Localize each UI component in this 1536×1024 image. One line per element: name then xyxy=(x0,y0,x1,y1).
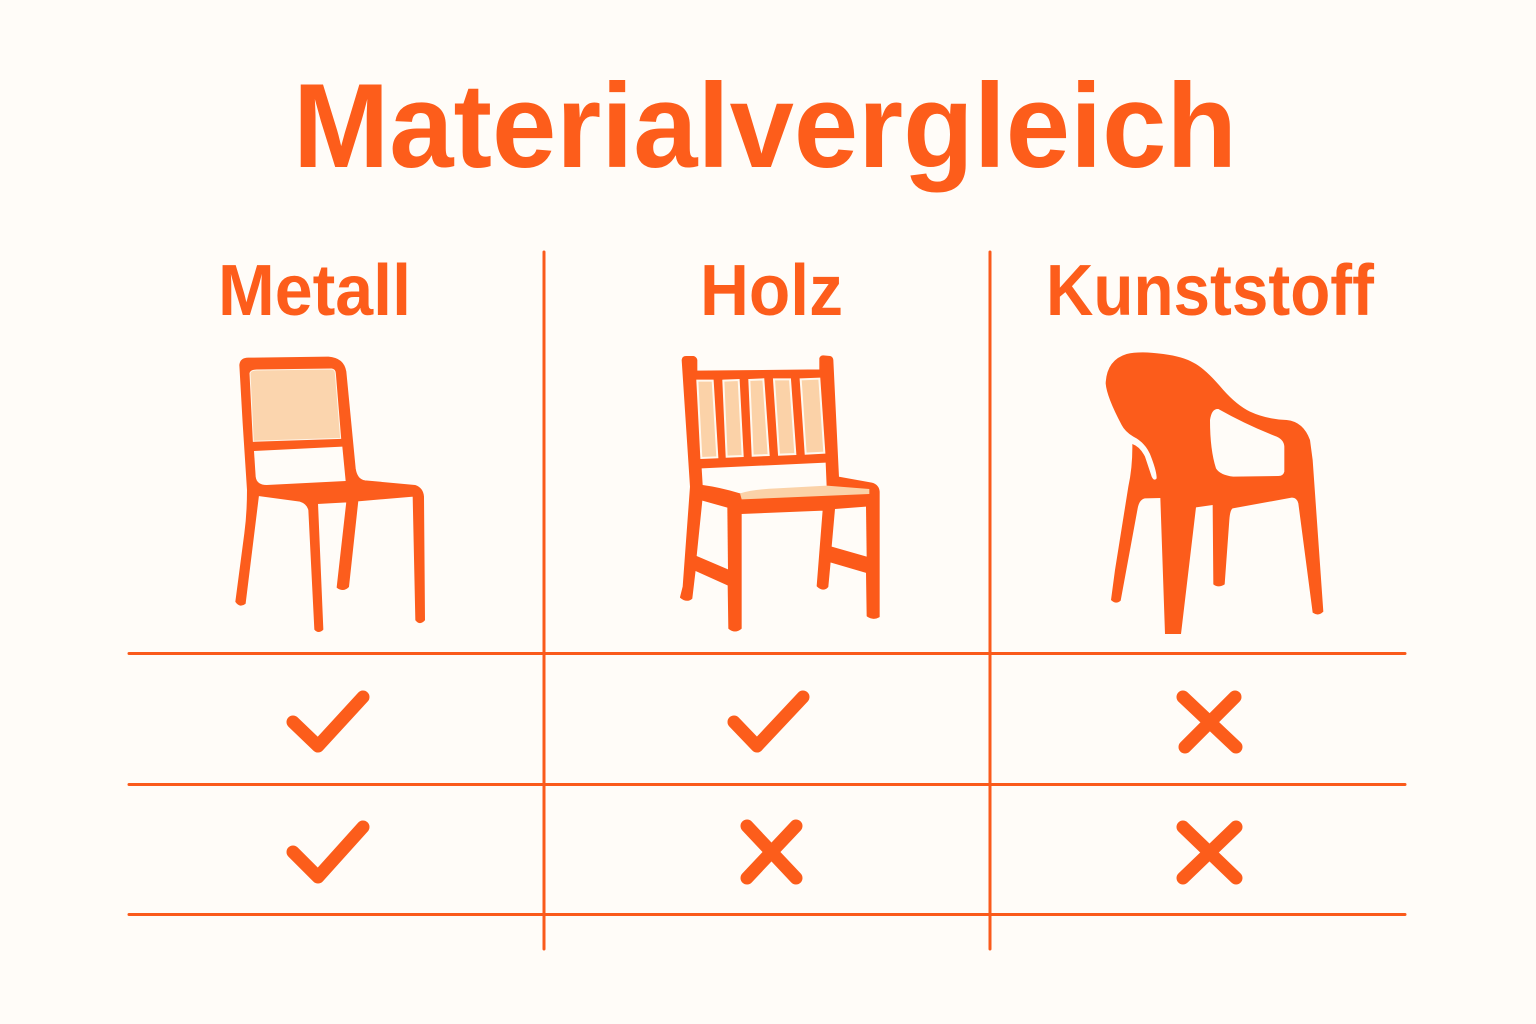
heading: Metall: Metall xyxy=(218,251,411,331)
heading: Kunststoff: Kunststoff xyxy=(1046,251,1375,331)
icon: check, Holz row 1 xyxy=(734,697,803,746)
icon: metal chair xyxy=(236,357,424,631)
icon: cross, Kunststoff row 1 xyxy=(1183,697,1236,747)
icon: plastic chair xyxy=(1106,352,1323,634)
heading: Holz: Holz xyxy=(700,251,843,331)
icon: check, Metall row 1 xyxy=(293,697,363,746)
icon: check, Metall row 2 xyxy=(293,827,363,877)
icon: wooden chair xyxy=(681,356,879,631)
icon: cross, Kunststoff row 2 xyxy=(1183,827,1236,878)
table grid xyxy=(129,252,1405,949)
title: Materialvergleich xyxy=(293,59,1237,193)
icon: cross, Holz row 2 xyxy=(747,826,796,878)
